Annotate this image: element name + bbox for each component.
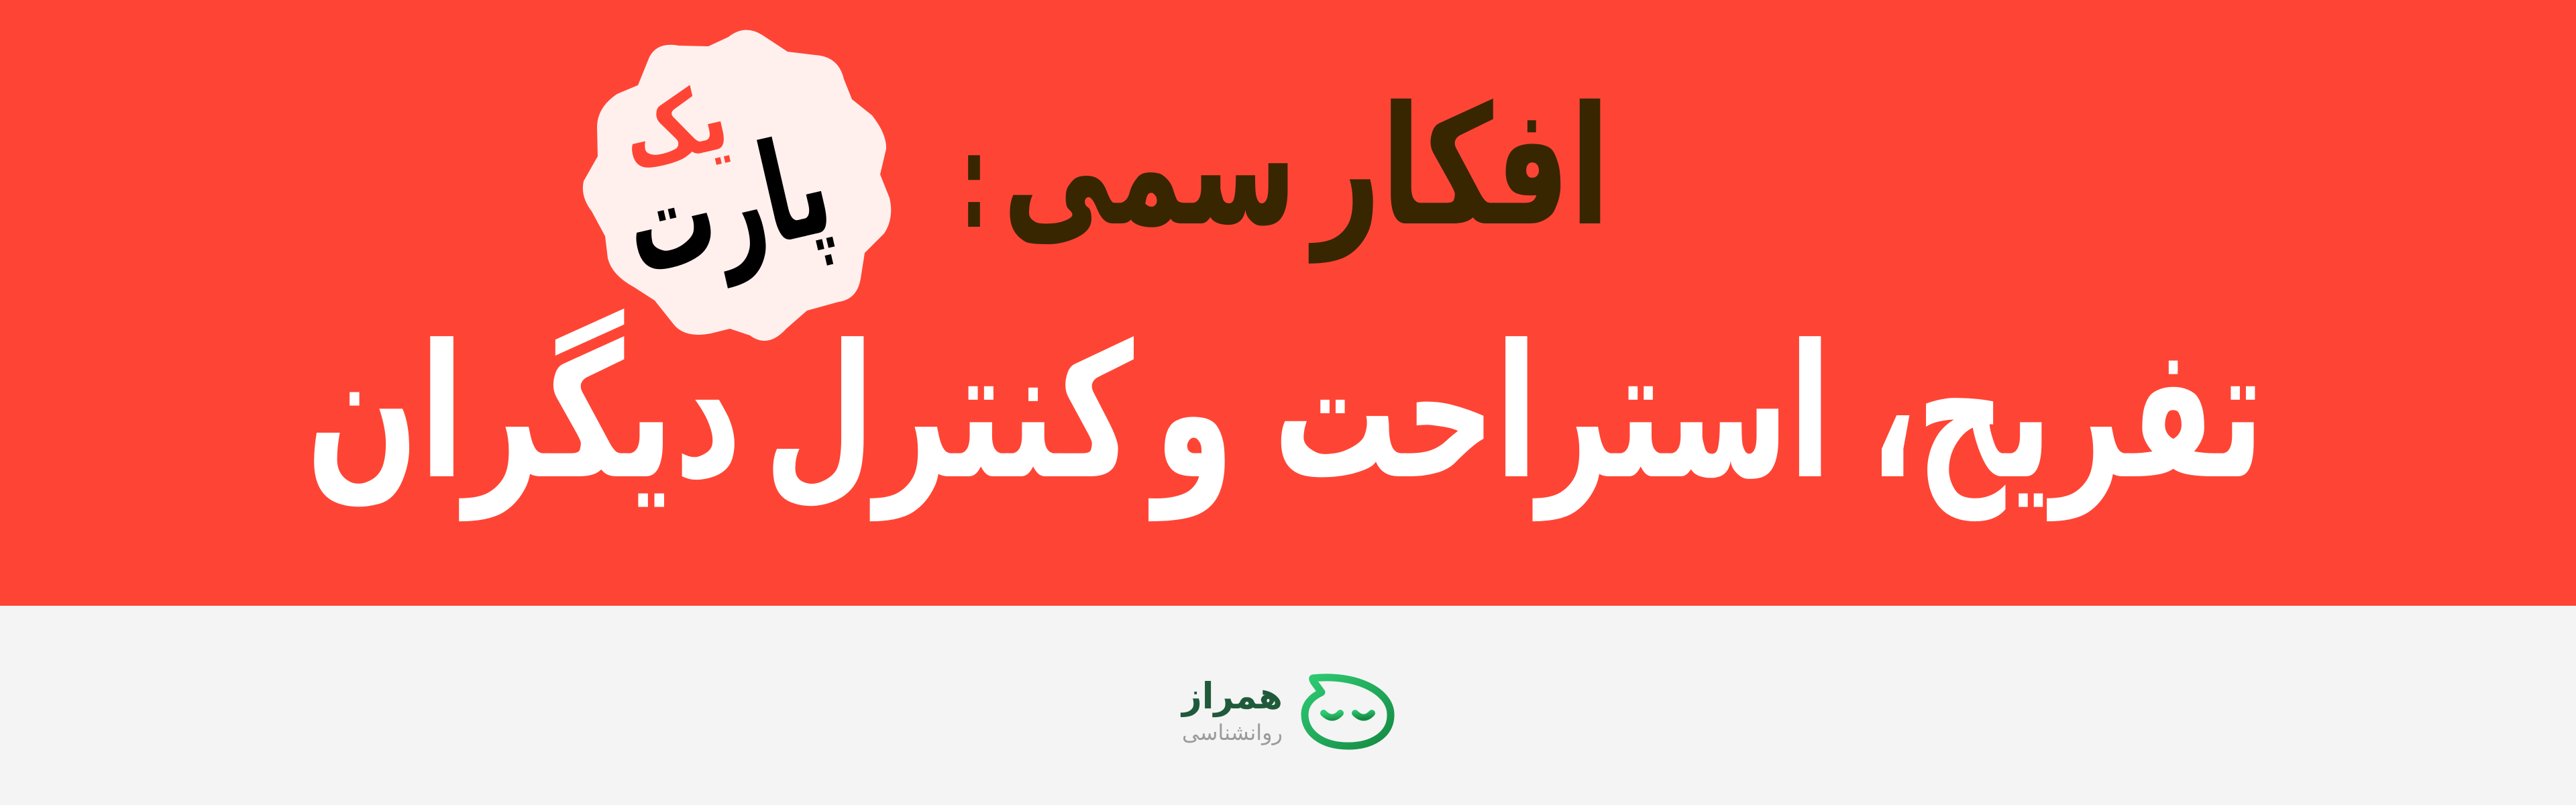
title line 1: : xyxy=(961,105,987,258)
badge: part one: پارت xyxy=(609,105,845,308)
badge: part one xyxy=(583,30,891,341)
title line 2: دیگران xyxy=(306,305,742,523)
title line 2: کنترل xyxy=(764,305,1135,523)
title line 2 xyxy=(306,305,2264,523)
panel: grey footer xyxy=(0,606,2576,805)
icon: smiling face speech bubble xyxy=(1305,678,1391,746)
title line 1: افکار xyxy=(1308,71,1610,264)
title line 2: استراحت xyxy=(1273,305,1831,523)
panel: red header xyxy=(0,0,2576,606)
logo subtitle: روانشناسی xyxy=(1182,720,1283,745)
logo wordmark: همراز xyxy=(1180,675,1283,717)
title line 1: سمی xyxy=(1003,71,1297,262)
logo xyxy=(1180,675,1391,746)
title line 2: تفریح، xyxy=(1870,305,2264,523)
title line 2: و xyxy=(1148,305,1234,523)
title line 1 xyxy=(961,71,1610,264)
badge: part one: یک xyxy=(612,64,737,190)
